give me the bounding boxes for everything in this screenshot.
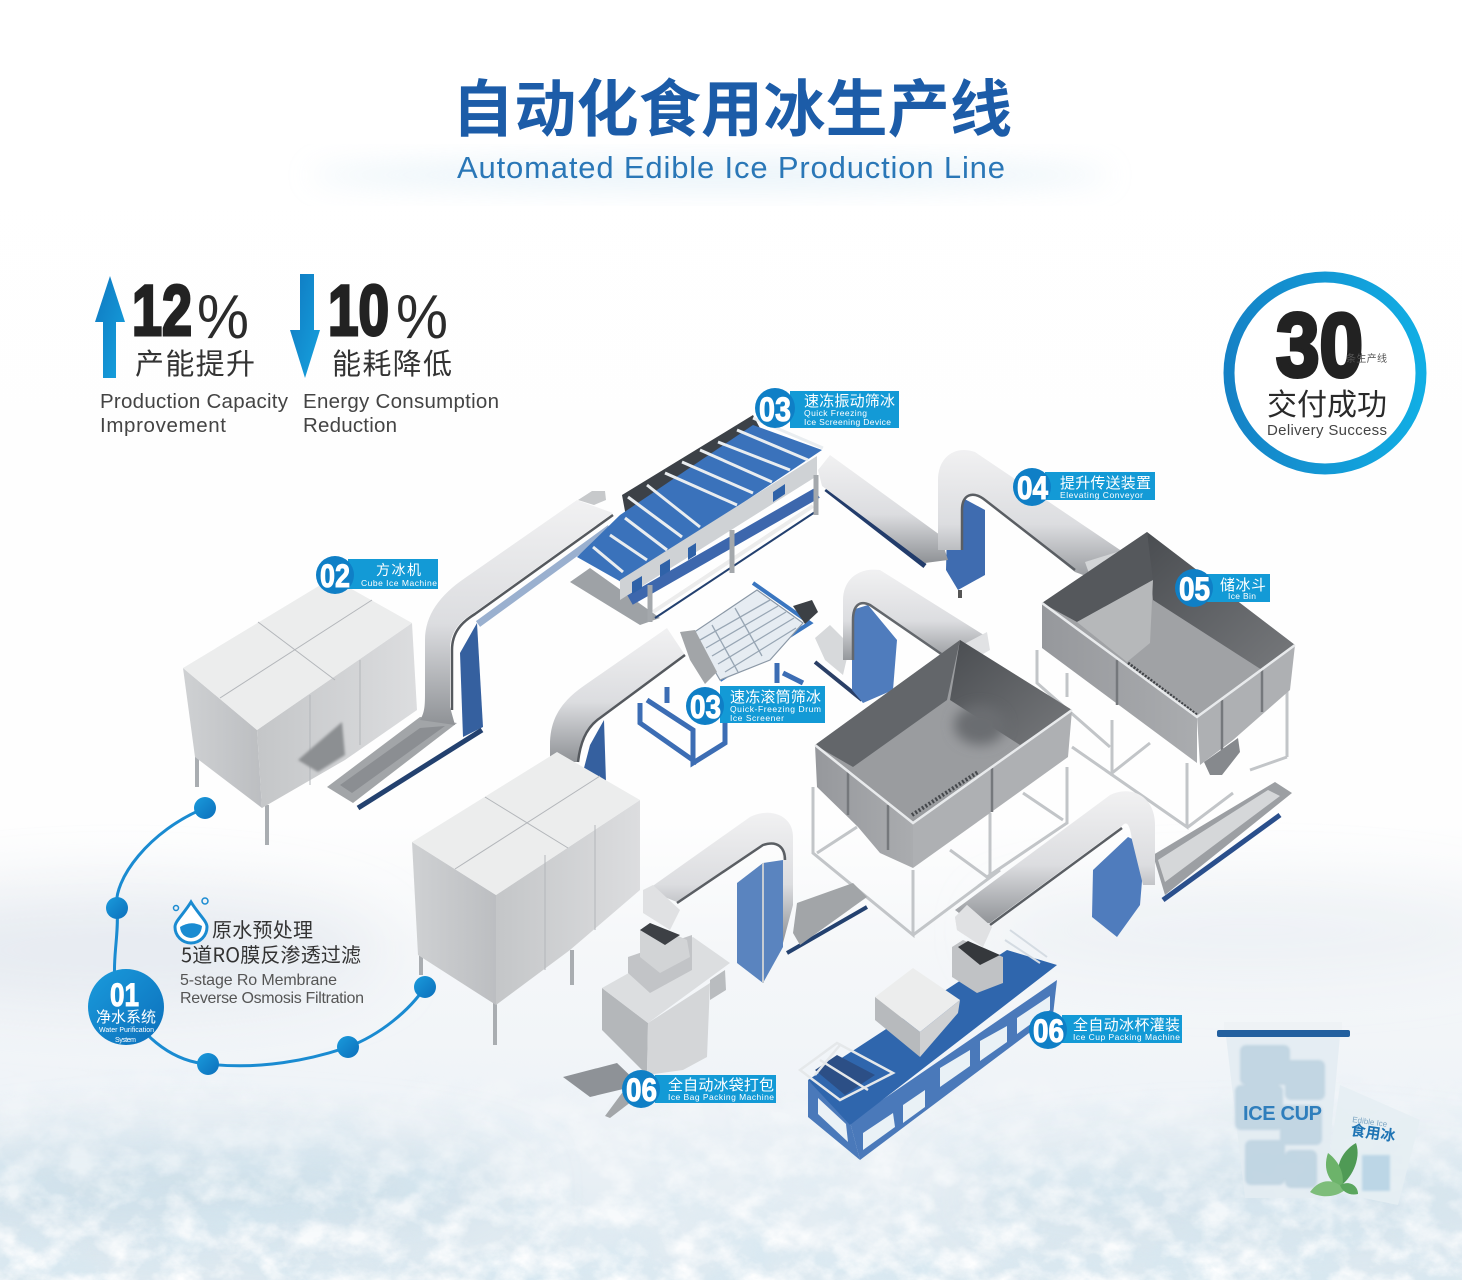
screw [912,772,978,815]
label 03 vibrating screen: Ice Screening Device [804,417,891,427]
number 10: 10 [328,272,389,351]
cabinet top [602,937,730,1023]
conveyor: lower middle to bag packer [643,813,867,983]
table top [808,950,1057,1125]
badge cn: 交付成功 [1267,380,1387,424]
machine: cube ice machine centre [412,752,640,1045]
right face [913,710,1072,868]
floor shade [954,705,1006,745]
frame [1037,650,1287,827]
label 05 ice bin [1175,569,1270,607]
node 01 water system: Water Purification [99,1027,154,1034]
end hood [955,905,992,947]
number 12: 12 [132,272,192,351]
label 06 cup packing [1029,1011,1182,1049]
node 01 water system: 净水系统 [96,1006,156,1027]
machine: ice bin 06 centre [813,640,1072,935]
left face [183,668,262,808]
badge number: 30 [1276,296,1363,396]
machine: cube ice machine 02 [183,578,417,845]
blue column [584,720,606,782]
side plate [620,456,817,600]
label 06 cup packing: 06 [1033,1013,1064,1049]
label 06 bag packing [622,1070,776,1108]
belt top [420,500,613,725]
top face [412,752,640,895]
percent sign: % [197,283,249,352]
machine: drum screener 03 [640,583,818,763]
blue column [460,623,483,737]
label 02 cube ice machine: 方冰机 [376,560,421,580]
badge ring [1229,277,1421,469]
rising belt [826,489,925,566]
icon: water drop [174,898,208,943]
front frame [850,980,1057,1160]
arch belt [938,450,1135,585]
label 03 drum screener: 03 [690,689,721,725]
label 03 drum screener [686,686,825,725]
label 02 cube ice machine: 02 [320,558,350,594]
machine: vibrating screen [570,415,823,625]
label 05 ice bin: 储冰斗 [1220,574,1266,595]
legs [421,950,572,1045]
node 01 water system: 01 [110,977,139,1013]
energy label en: Reduction [303,414,397,437]
side frame [808,1080,860,1160]
left rack [800,1043,893,1100]
blue drum frame [720,583,810,680]
loop line [114,808,425,1066]
right back wall [1147,532,1295,670]
capacity label en: Improvement [100,414,226,437]
stand [640,663,803,763]
machine: cup packing 06 [800,905,1057,1160]
stat: capacity up 12% [95,272,289,437]
icon: up arrow [95,276,125,378]
left back wall [1042,532,1153,622]
label 04 elevating conveyor: 04 [1017,470,1048,506]
pretreatment text: 5道RO膜反渗透过滤 [181,939,361,968]
product: ice bag: Edible Ice [1352,1115,1388,1129]
label 02 cube ice machine: Cube Ice Machine [361,578,437,588]
drum [693,590,803,680]
frame [813,767,1067,935]
right face and hopper [1197,645,1295,765]
lower belt [787,907,867,953]
blue column [946,490,985,590]
label 03 vibrating screen: 速冻振动筛冰 [804,390,895,411]
conveyor: outfeed of bin 05 [1153,782,1292,900]
drive box [793,600,818,624]
tubes [1005,930,1047,963]
pretreatment text: 原水预处理 [212,914,313,943]
label 02 cube ice machine [316,556,438,594]
capacity label cn: 产能提升 [135,341,255,383]
label 03 vibrating screen: 03 [759,391,791,429]
energy label en: Energy Consumption [303,390,499,413]
transfer belt [815,625,850,675]
chute [563,1063,640,1097]
stat: energy down 10% [290,272,499,437]
back wall [622,415,762,522]
label 06 bag packing: 06 [626,1072,657,1108]
icon: down arrow [290,274,320,378]
label 03 drum screener: Quick-Freezing Drum [730,704,821,714]
blue column [1092,837,1145,937]
badge en: Delivery Success [1267,422,1387,439]
right face [257,623,417,808]
legs [197,757,267,845]
rails [630,493,817,600]
lower head [628,935,692,993]
legs [650,475,816,622]
top face [183,578,412,730]
label 05 ice bin: 05 [1179,571,1210,607]
belt [550,628,685,762]
conveyor: lower right to cup line [955,791,1155,947]
arch belt [647,813,793,943]
purification loop [88,797,436,1075]
title: Automated Edible Ice Production Line [457,150,1005,185]
left back wall [815,640,960,767]
product: ice bag [1325,1085,1420,1205]
product: ice bag: 食用冰 [1349,1119,1397,1146]
filler head [952,940,1003,993]
label 03 vibrating screen [755,388,899,429]
blue column [852,605,897,703]
badge unit: 条生产线 [1346,350,1387,365]
machine: bag packing 06 [563,923,730,1118]
label 06 bag packing: 全自动冰袋打包 [668,1074,774,1095]
label 05 ice bin: Ice Bin [1228,591,1256,601]
label 06 cup packing: 全自动冰杯灌装 [1073,1014,1180,1035]
label 06 cup packing: Ice Cup Packing Machine [1073,1032,1180,1042]
left floor [1077,580,1153,662]
background: ice and mist [0,865,1462,1280]
screw [1128,663,1197,715]
left face [1042,603,1197,763]
end hood [643,885,680,930]
pretreatment text: 5-stage Ro Membrane [180,972,337,989]
node 01 water system: System [115,1037,136,1044]
product: ice cup: ICE CUP [1243,1103,1322,1125]
machine: ice bin 05 [1037,532,1295,827]
top box [875,968,960,1032]
cabinet right face [647,983,710,1075]
upper head [640,923,690,973]
percent sign: % [396,283,448,352]
frame windows [863,996,1050,1150]
end hood [955,905,992,947]
tray [570,568,660,625]
title wisp [310,161,1110,189]
right back wall [950,640,1072,745]
node 01 water system [88,969,164,1045]
conveyor: cube machine to vibrating screen [327,491,613,808]
right face [496,800,640,1005]
interior base [1042,532,1295,717]
belt [955,791,1155,925]
label 04 elevating conveyor [1013,468,1155,506]
blue deck [577,425,822,583]
label 04 elevating conveyor: 提升传送装置 [1060,472,1151,493]
badge: 30 lines delivered [1229,277,1421,469]
loop nodes [106,797,436,1075]
product: ice cup [1217,1022,1350,1198]
side drawer [710,970,726,1000]
interior base [815,640,1072,823]
title: 自动化食用冰生产线 [452,59,1012,149]
conveyor: drum to bin 06 [815,570,990,703]
left face [815,745,913,868]
blue column [737,860,783,983]
conveyor: elevating conveyor 04 [818,450,1136,598]
label 03 drum screener: Ice Screener [730,713,784,723]
energy label cn: 能耗降低 [332,341,452,383]
cabinet left face [602,988,648,1075]
label 03 vibrating screen: Quick Freezing [804,408,867,418]
icon: mint leaves [1310,1143,1358,1196]
hatch shadow [298,722,345,772]
pretreatment text [180,914,364,1007]
arch belt [843,570,987,663]
lower belt [358,730,482,808]
label 04 elevating conveyor: Elevating Conveyor [1060,490,1143,500]
left face [412,842,496,1005]
conveyor: drum screen feed [550,628,685,782]
label 03 drum screener: 速冻滚筒筛冰 [730,686,821,707]
label 06 bag packing: Ice Bag Packing Machine [668,1092,774,1102]
pretreatment text: Reverse Osmosis Filtration [180,990,364,1007]
slats [593,418,823,572]
drum collar [680,630,717,684]
capacity label en: Production Capacity [100,390,289,413]
